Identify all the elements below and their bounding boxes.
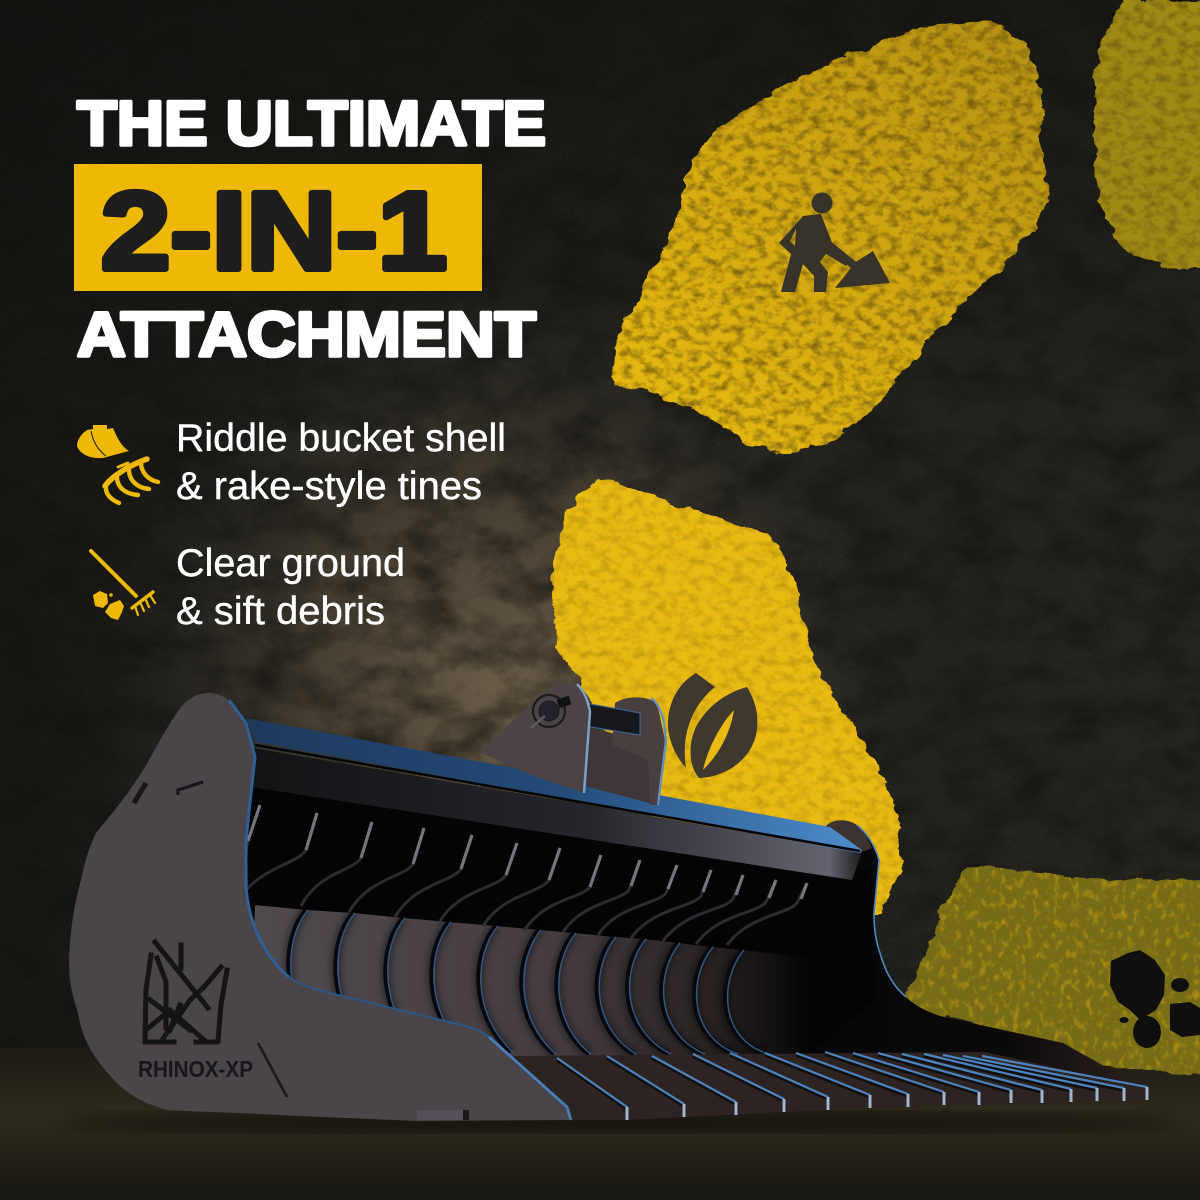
painted footprint: middle with leaf [553,480,901,915]
icon: rocks [1110,950,1200,1048]
icon: road worker with shovel [779,192,890,292]
left side plate [69,693,571,1121]
text: clear ground and sift debris: Clear ground [176,542,405,585]
hitch bracket right ear [585,697,666,805]
painted footprint: lower-right with rocks [900,868,1200,1075]
icon: leaves [668,673,757,778]
rhino logo cut-out [145,942,227,1042]
title: The Ultimate: THE ULTIMATE [77,89,546,159]
floor shadow under bucket [60,1112,1180,1132]
S-shaped upper tines [246,805,807,945]
text: clear ground and sift debris: & sift debris [176,590,385,633]
text: riddle bucket shell and rake-style tines: & rake-style tines [176,465,482,508]
text: riddle bucket shell and rake-style tines: Riddle bucket shell [176,417,506,460]
painted footprint: upper toe with worker [612,23,1048,451]
locking pin [531,695,570,728]
title: Attachment: ATTACHMENT [77,300,536,370]
icon: rake and debris [91,551,155,620]
right side plate [780,820,1147,1100]
brand mark frame [258,1043,287,1097]
bucket interior [246,770,875,1060]
hitch bracket left ear [480,680,590,793]
riddle bucket [69,680,1147,1121]
blue top strip [246,718,862,853]
hitch rod [585,703,640,735]
top beam [251,748,862,880]
tine highlights [248,805,807,899]
floor [0,1048,1200,1200]
title highlight: 2-in-1: 2-IN-1 [101,170,447,293]
ground rake tines [510,1052,1147,1120]
brand name: RHINOX-XP [138,1056,253,1082]
curved riddle plates [250,905,810,1060]
icon: bucket and rake tines [77,425,158,503]
painted footprint: top-right toe [1093,0,1200,268]
